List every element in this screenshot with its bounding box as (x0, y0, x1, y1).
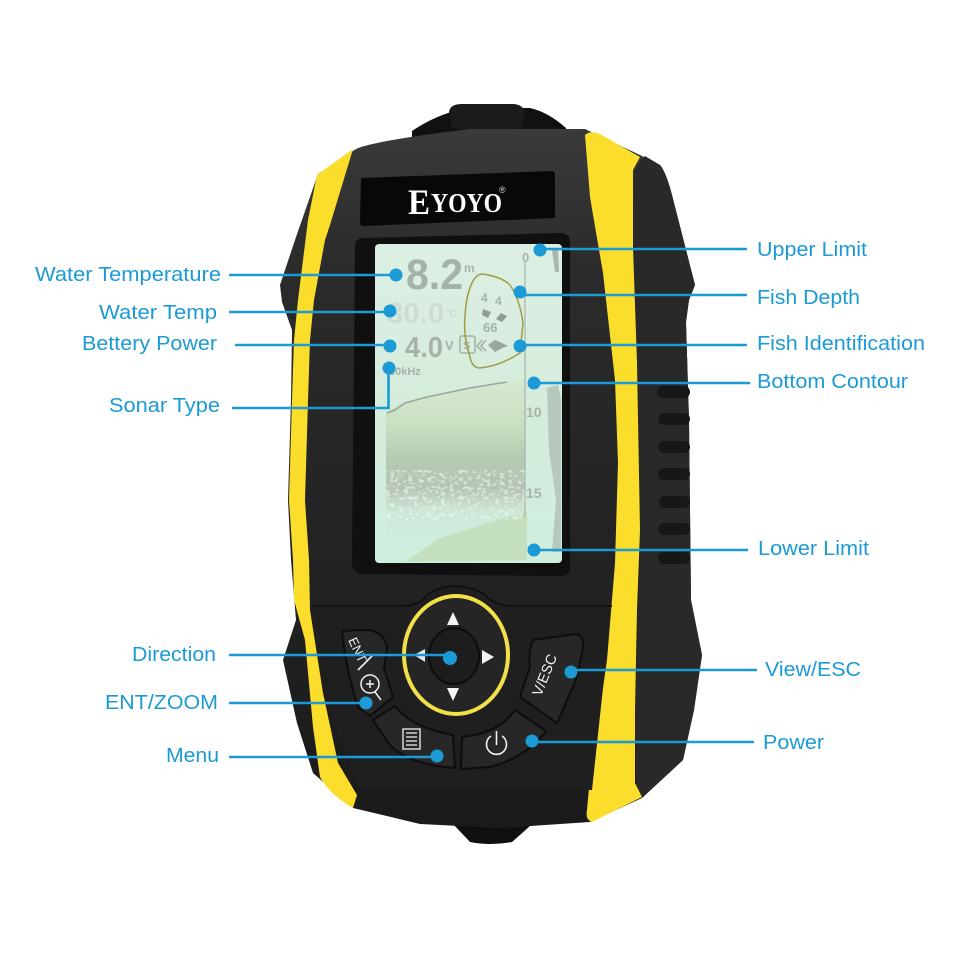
control panel fill (316, 607, 610, 790)
callout: Water Temperature: Water Temperature (35, 264, 221, 286)
callout: Menu: Menu (166, 745, 219, 767)
top mount knob (449, 104, 525, 131)
power button (461, 710, 546, 769)
ENT zoom button (342, 630, 393, 716)
power icon (487, 731, 507, 754)
lower seabed wedge (405, 512, 527, 562)
LCD screen: °C (445, 308, 457, 320)
depth reading: 8.2 (406, 251, 463, 299)
sonar mode icon: S (463, 340, 470, 352)
callout: Menu (166, 745, 444, 767)
arrow left (414, 649, 425, 662)
left yellow stripe (289, 149, 357, 808)
callout: Fish Depth: Fish Depth (757, 287, 860, 309)
fish symbols: 4 (481, 291, 488, 305)
menu button (373, 706, 455, 768)
logo plate: ® (499, 185, 506, 195)
callout: Power: Power (763, 732, 824, 754)
scale: 10 (526, 404, 542, 420)
callout: Fish Identification (514, 333, 925, 355)
magnifier icon (361, 675, 381, 700)
body shell (280, 129, 702, 828)
callout: View/ESC: View/ESC (765, 659, 861, 681)
arrow up (447, 612, 459, 625)
control panel outline (313, 586, 612, 606)
callout: Water Temp (99, 302, 396, 324)
callout: Lower Limit: Lower Limit (758, 538, 869, 560)
fish symbols (477, 291, 508, 352)
right yellow stripe (585, 132, 642, 822)
callout: Water Temperature (35, 264, 402, 286)
callout: Sonar Type (109, 362, 396, 417)
rear mount arc (412, 108, 566, 140)
callout: Bottom Contour: Bottom Contour (757, 371, 908, 393)
callout: ENT/ZOOM (105, 692, 372, 714)
callout: Bottom Contour (528, 371, 908, 393)
bottom mount knob (453, 824, 530, 844)
sonar mode icon (460, 336, 475, 353)
fish symbols: 66 (483, 320, 497, 335)
callout: Fish Identification: Fish Identification (757, 333, 925, 355)
LCD screen: V (445, 338, 454, 353)
callout: ENT/ZOOM: ENT/ZOOM (105, 692, 218, 714)
sonar seabed (386, 378, 525, 540)
arrow right (482, 650, 494, 664)
view esc button (520, 634, 583, 723)
logo plate: YOYO (431, 188, 502, 218)
callout: Upper Limit: Upper Limit (757, 239, 867, 261)
pad centre (429, 628, 479, 684)
callout: Lower Limit (528, 538, 869, 560)
logo text: E (408, 182, 430, 222)
callout: Sonar Type: Sonar Type (109, 395, 220, 417)
screen bezel (352, 233, 570, 576)
LCD screen (375, 244, 562, 563)
scale: 0 (522, 250, 529, 265)
device: fish finder (280, 104, 702, 844)
direction pad (404, 596, 508, 714)
fish outline (465, 274, 523, 368)
callout: Direction (132, 644, 457, 666)
right edge sonar band (547, 385, 561, 552)
LCD screen: m (464, 261, 475, 275)
bottom contour line (387, 382, 507, 413)
frequency text: 00kHz (389, 366, 421, 378)
logo plate (360, 171, 555, 226)
callout: View/ESC (564, 659, 861, 681)
callout: Upper Limit (534, 239, 867, 261)
voltage reading: 4.0 (405, 332, 443, 364)
scale: 15 (526, 485, 542, 501)
callout: Fish Depth (514, 286, 860, 309)
menu icon (403, 729, 420, 749)
temperature reading: 30.0 (387, 298, 444, 330)
right side grip panel (633, 156, 702, 798)
callout: Direction: Direction (132, 644, 216, 666)
sonar speckle (386, 470, 526, 520)
ENT label: ENT (345, 635, 370, 665)
view esc label: V/ESC (530, 652, 561, 698)
grip ribs (657, 386, 690, 564)
fish symbols: 4 (495, 294, 502, 308)
callout: Water Temp: Water Temp (99, 302, 217, 324)
callout: Bettery Power: Bettery Power (82, 333, 217, 355)
scale (522, 250, 542, 518)
arrow down (447, 688, 459, 701)
callout: Power (526, 732, 824, 754)
callout: Bettery Power (82, 333, 396, 355)
